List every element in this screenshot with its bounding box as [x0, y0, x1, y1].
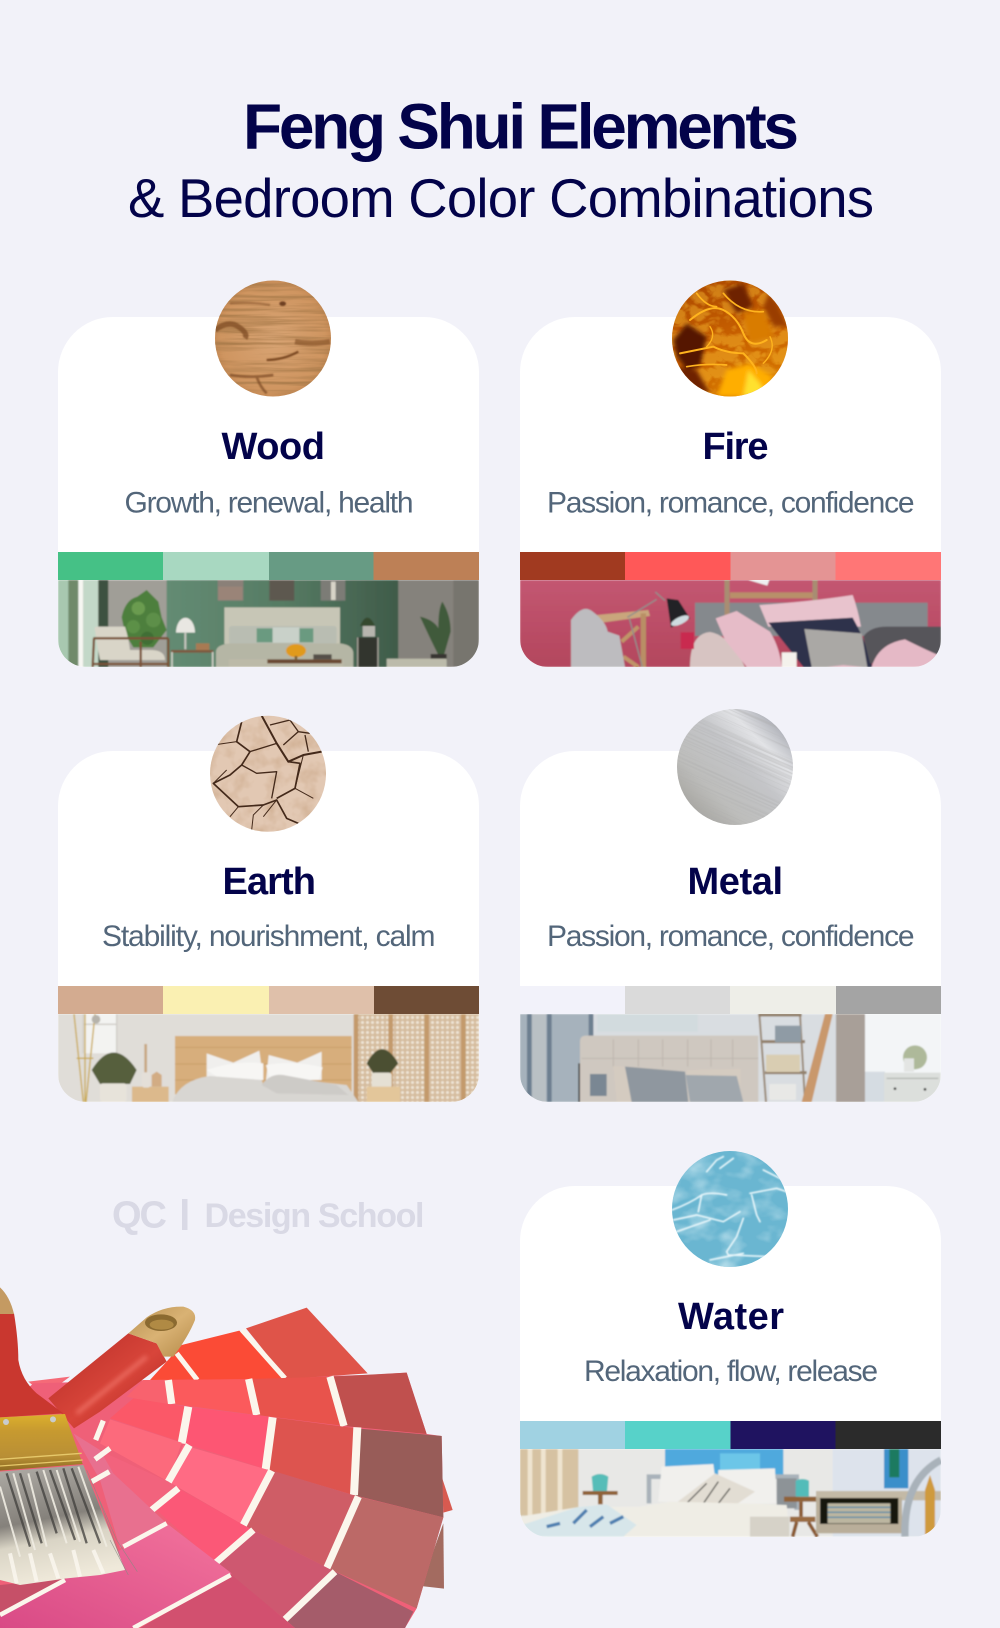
panel: fire	[520, 280, 941, 667]
water description: Relaxation, flow, release	[584, 1355, 878, 1388]
strip 4	[100, 1419, 443, 1608]
metal heading: Metal	[688, 861, 783, 903]
fire colour swatches	[520, 552, 941, 580]
logo: QC Design School	[112, 1194, 424, 1236]
wood heading: Wood	[222, 426, 325, 468]
panel: metal	[520, 709, 941, 1102]
panel: wood	[58, 280, 479, 667]
title: Feng Shui Elements	[243, 90, 799, 162]
earth colour swatches	[58, 986, 479, 1014]
strip 6	[0, 1421, 295, 1628]
strip 2	[127, 1373, 427, 1434]
earth description: Stability, nourishment, calm	[102, 920, 436, 953]
logo: QC Design School: QC	[112, 1194, 167, 1236]
strip 3	[110, 1398, 443, 1517]
illustration: paint swatch fan	[0, 1308, 453, 1628]
wood bedroom photo	[58, 580, 479, 667]
panel: earth	[58, 715, 479, 1102]
water bedroom photo	[520, 1449, 941, 1537]
wood description: Growth, renewal, health	[124, 486, 414, 520]
title	[128, 90, 874, 229]
earth heading: Earth	[222, 861, 316, 903]
rear swatch edges	[0, 1373, 453, 1628]
fire heading: Fire	[702, 426, 768, 468]
icon: brushed metal circle	[677, 709, 793, 825]
wood colour swatches	[58, 552, 479, 580]
fire bedroom photo	[520, 580, 941, 667]
metal bedroom photo	[520, 1014, 941, 1102]
icon: wood texture circle	[215, 280, 331, 397]
panel: water	[520, 1151, 941, 1537]
water heading: Water	[678, 1296, 784, 1338]
strip 1	[150, 1308, 368, 1380]
fire description: Passion, romance, confidence	[547, 486, 914, 520]
illustration: main paintbrush	[0, 1287, 137, 1585]
metal colour swatches	[520, 986, 941, 1014]
water colour swatches	[520, 1421, 941, 1449]
strip 5	[98, 1450, 413, 1628]
metal description: Passion, romance, confidence	[547, 920, 914, 953]
illustration: paintbrush lying behind	[48, 1307, 195, 1428]
icon: earth texture circle	[210, 715, 326, 832]
logo: QC Design School: Design School	[204, 1197, 424, 1235]
earth bedroom photo	[58, 1014, 479, 1102]
title: & Bedroom Color Combinations	[128, 168, 874, 229]
icon: water texture circle	[672, 1151, 788, 1268]
icon: fire texture circle	[672, 280, 788, 397]
